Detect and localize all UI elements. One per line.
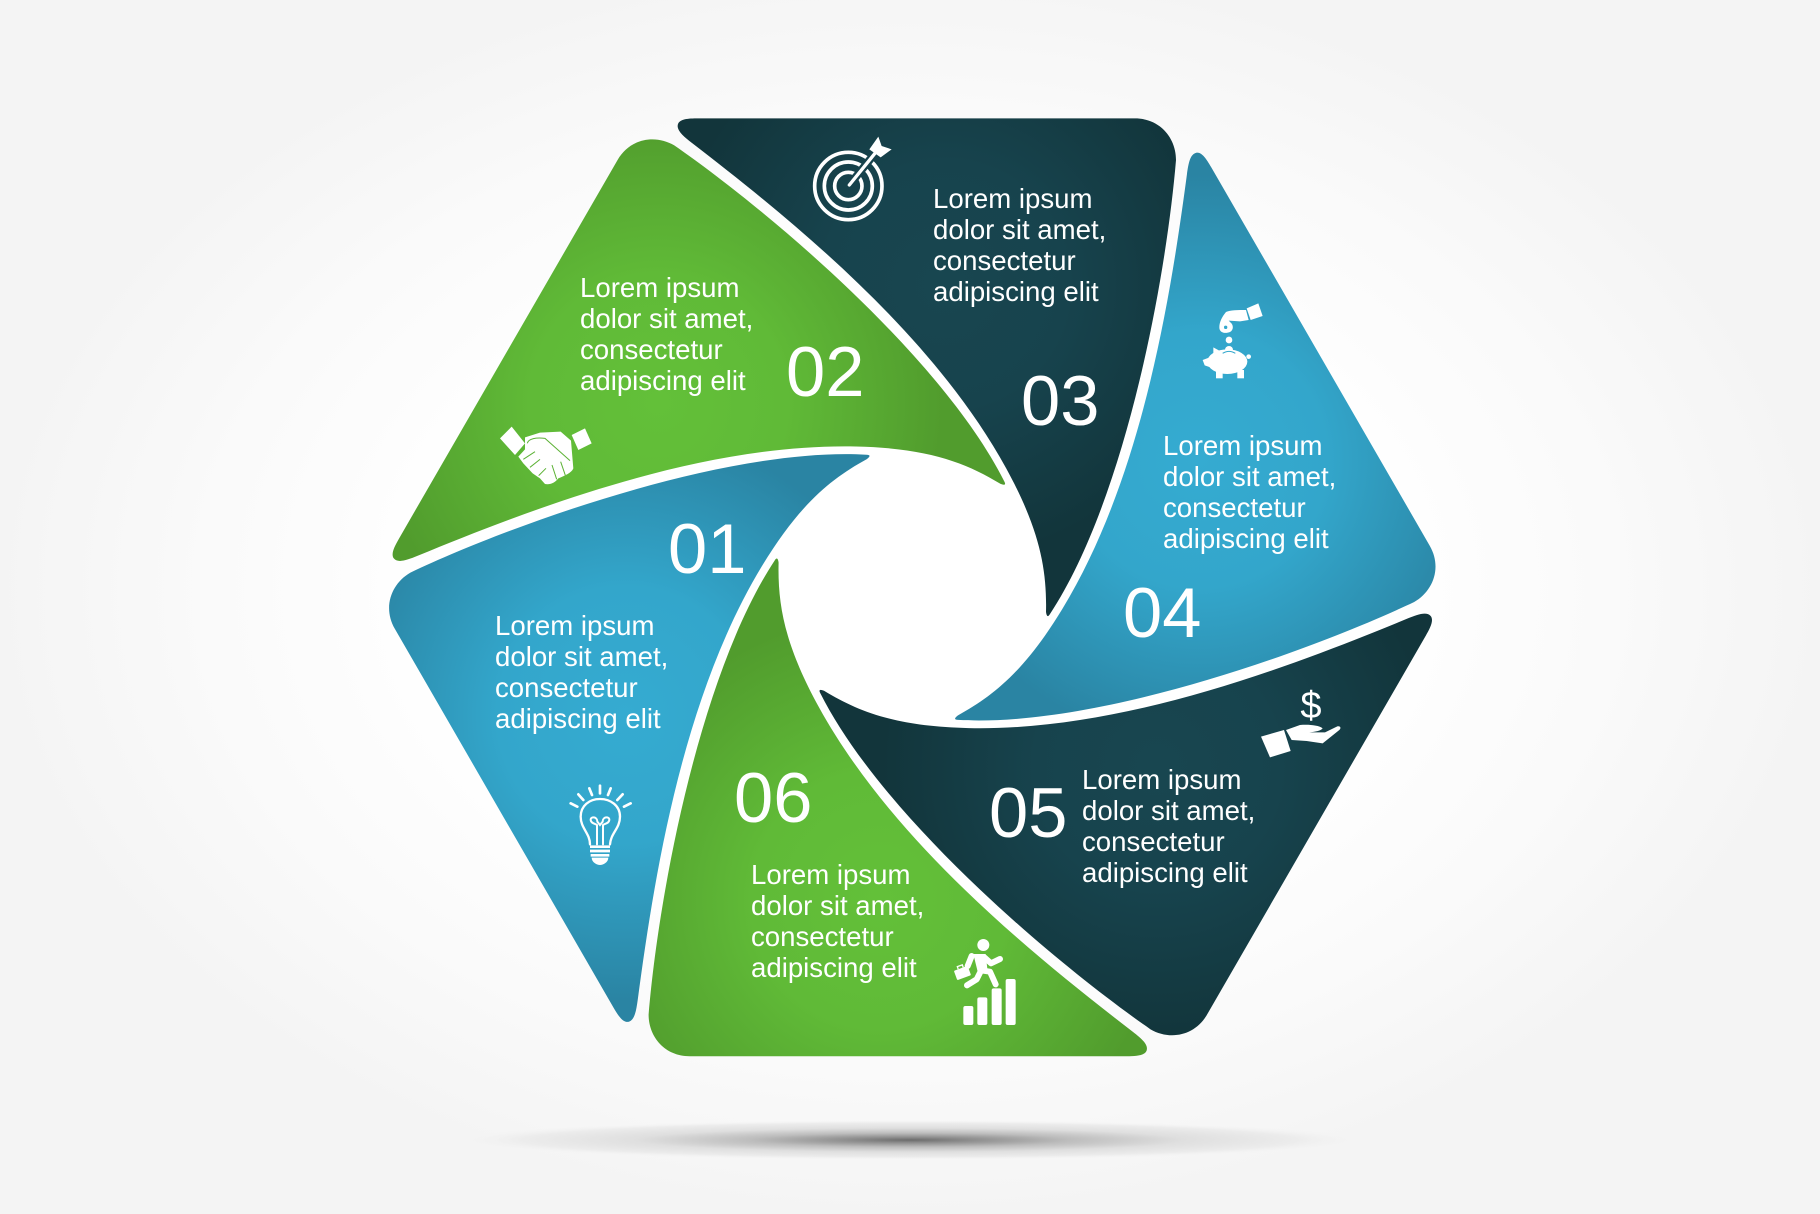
panel 04 <box>770 150 1450 830</box>
text block 05: adipiscing elit <box>1082 857 1248 888</box>
text block 04: adipiscing elit <box>1163 523 1329 554</box>
text block 06: dolor sit amet, <box>751 890 924 921</box>
text block 01: consectetur <box>495 672 638 703</box>
text block 02: consectetur <box>580 334 723 365</box>
text block 02: adipiscing elit <box>580 365 746 396</box>
text block 01: dolor sit amet, <box>495 641 668 672</box>
number 04: 04 <box>1123 573 1201 652</box>
shape: panel 05 <box>756 370 1436 1050</box>
shape: panel 06 <box>649 559 1147 1056</box>
shape: panel 01 <box>374 345 1055 1025</box>
shape: panel 04 <box>770 150 1450 830</box>
shape: panel 02 <box>389 124 1069 805</box>
text block 05: Lorem ipsum <box>1082 764 1242 795</box>
text block 05: consectetur <box>1082 826 1225 857</box>
shape: panel 03 <box>678 118 1176 616</box>
text block 01: Lorem ipsum <box>495 610 654 641</box>
text block 04: dolor sit amet, <box>1163 461 1336 492</box>
text block 05: dolor sit amet, <box>1082 795 1255 826</box>
icon: hand with dollar <box>1261 685 1340 757</box>
panel 02 <box>389 124 1069 805</box>
text block 02: Lorem ipsum <box>580 272 740 303</box>
icon: piggy bank <box>1203 303 1263 378</box>
number 03: 03 <box>1021 361 1099 440</box>
text block 04: consectetur <box>1163 492 1306 523</box>
number 01: 01 <box>668 509 746 588</box>
text block 01: adipiscing elit <box>495 703 661 734</box>
number 06: 06 <box>734 758 812 837</box>
icon: light bulb <box>571 786 631 865</box>
text block 03: dolor sit amet, <box>933 214 1106 245</box>
number 02: 02 <box>786 332 864 411</box>
text block 06: adipiscing elit <box>751 952 917 983</box>
panel 01 <box>374 345 1055 1025</box>
panel 06 <box>649 559 1147 1056</box>
text block 04: Lorem ipsum <box>1163 430 1322 461</box>
text block 06: Lorem ipsum <box>751 859 910 890</box>
icon: handshake <box>500 427 592 484</box>
number 05: 05 <box>989 773 1067 852</box>
icon: hand with dollar: $ <box>1300 685 1322 727</box>
panel 03 <box>678 118 1176 616</box>
ground shadow <box>455 1120 1365 1160</box>
icon: target with arrow <box>815 137 892 220</box>
panel 05 <box>756 370 1436 1050</box>
text block 06: consectetur <box>751 921 894 952</box>
text block 03: Lorem ipsum <box>933 183 1092 214</box>
text block 03: adipiscing elit <box>933 276 1099 307</box>
text block 02: dolor sit amet, <box>580 303 753 334</box>
text block 03: consectetur <box>933 245 1076 276</box>
icon: runner on rising bars <box>953 939 1016 1025</box>
